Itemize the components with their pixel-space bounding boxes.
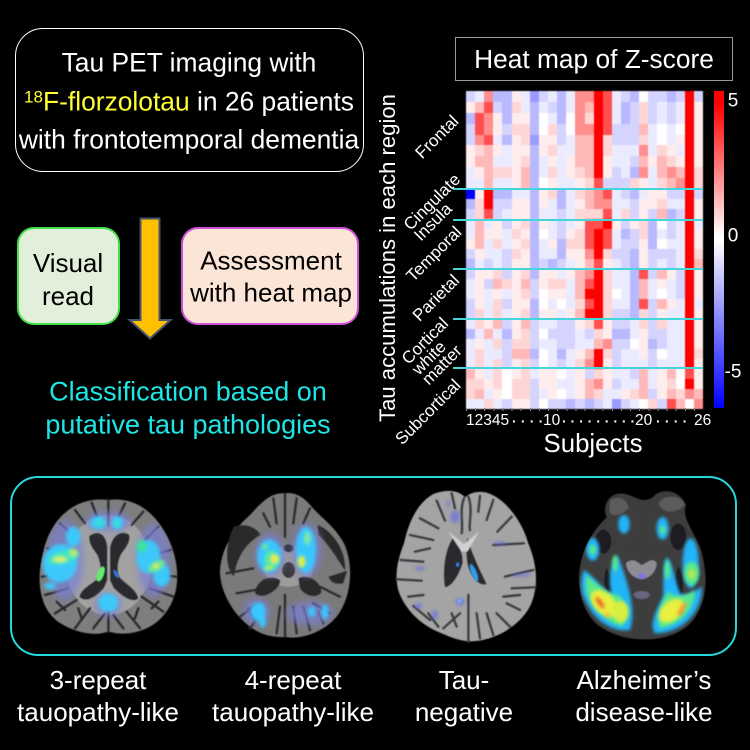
x axis numbers: ········· [562,413,639,429]
classification text [45,376,331,439]
brain: 3-repeat tauopathy-like [38,499,177,634]
title text [18,47,360,154]
text: visual read: Visual [33,248,103,278]
title box [15,28,364,172]
x axis numbers: 10 [543,412,560,429]
label: Alzheimer's disease-like: Alzheimer’s [577,665,711,695]
x axis numbers: 20 [635,412,652,429]
classification text: putative tau pathologies [45,409,331,439]
y axis label: Tau accumulations in each region [375,94,400,422]
colour bar label -5: -5 [725,362,741,382]
region label: Frontal: Frontal [412,112,462,162]
text: assessment [190,246,352,307]
x axis numbers: ···· [656,413,691,429]
region label: Subcortical: Subcortical [392,376,464,448]
box: visual read [17,227,120,325]
region label: Temporal: Temporal [403,223,465,285]
colour bar label 5: 5 [728,90,738,112]
classification text: Classification based on [49,376,327,406]
colour bar [714,91,724,408]
brain images [39,490,706,644]
label: tau-negative [415,665,513,727]
label: 4-repeat tauopathy-like [212,665,374,727]
brain: tau-negative [397,491,536,641]
title text: with frontotemporal dementia [19,124,359,154]
label: 3-repeat tauopathy-like [17,665,179,727]
text: visual read: read [42,280,94,310]
x axis numbers: ···· [512,413,547,429]
text: visual read [33,248,103,310]
box: assessment with heat map [181,227,359,325]
heat map [465,90,704,410]
panel: brain classes [10,476,737,656]
region label: matter: matter [418,341,466,389]
x axis ticks [466,408,703,411]
text: assessment: Assessment [200,246,342,276]
label: Alzheimer's disease-like: disease-like [575,697,713,727]
title text: 18F-florzolotau in 26 patients [24,86,354,116]
region label: Parietal: Parietal [409,271,463,325]
title text: Tau PET imaging with [62,47,316,77]
label: tau-negative: negative [415,697,513,727]
heat map title text: Heat map of Z-score [474,43,714,73]
label: 4-repeat tauopathy-like: 4-repeat [245,665,341,695]
region label: white: white [408,337,450,379]
x axis label: Subjects [544,430,642,458]
text: assessment: with heat map [190,277,352,307]
brain: Alzheimer's disease-like [579,491,706,639]
label: Alzheimer's disease-like [575,665,713,727]
colour bar label 0: 0 [728,226,738,246]
label: tau-negative: Tau- [439,665,489,695]
brain: 4-repeat tauopathy-like [220,493,350,638]
region separator lines [453,188,703,369]
x axis numbers: 12345 [466,412,509,429]
region label: Insula: Insula [410,199,456,245]
region label: Cingulate: Cingulate [400,170,464,234]
arrow: down [127,218,173,340]
label: 3-repeat tauopathy-like: tauopathy-like [17,697,179,727]
region label: Cortical: Cortical [398,314,452,368]
x axis numbers [466,412,711,429]
x axis numbers: 26 [694,412,711,429]
label: 4-repeat tauopathy-like: tauopathy-like [212,697,374,727]
label: 3-repeat tauopathy-like: 3-repeat [50,665,146,695]
heat map title [455,37,733,81]
